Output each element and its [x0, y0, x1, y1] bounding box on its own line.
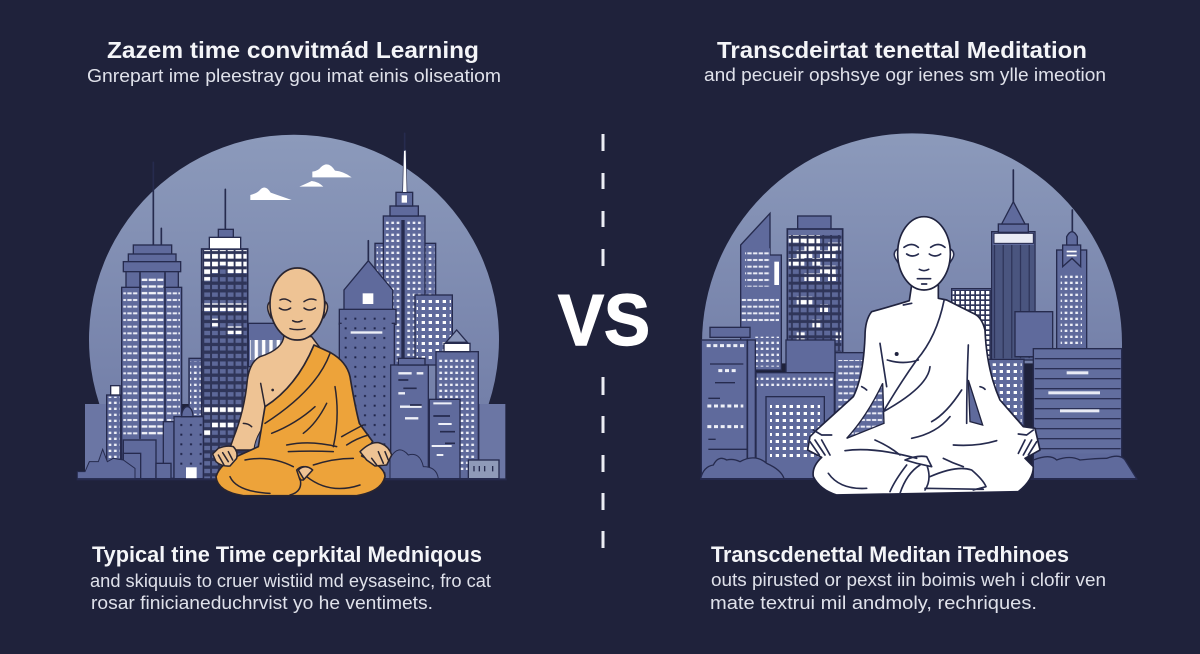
caption: left: rosar finicianeduchrvist yo he ventimets. [91, 593, 433, 613]
caption: right: outs pirusted or pexst iin boimis weh i clofir ven [711, 570, 1106, 590]
clouds [250, 164, 352, 200]
title: left: Zazem time convitmád Learning [107, 37, 479, 63]
caption: left: Typical tine Time ceprkital Medniqous [92, 542, 482, 567]
left skyline [77, 162, 505, 479]
caption: right [710, 542, 1106, 613]
right skyline [339, 133, 499, 479]
sky dome [702, 133, 1122, 363]
dashed divider [602, 134, 604, 548]
illustration: right meditator and city [700, 133, 1137, 495]
right illustration skyline [700, 170, 1137, 480]
VS label: VS [558, 281, 650, 361]
caption: right: Transcdenettal Meditan iTedhinoes [711, 542, 1069, 567]
title: left [87, 37, 501, 86]
caption: left [90, 542, 491, 613]
sky circle [89, 135, 499, 404]
ground [77, 478, 507, 480]
caption: left: and skiquuis to cruer wistiid md eysaseinc, fro cat [90, 571, 491, 591]
title: right [704, 37, 1106, 85]
illustration: left zazen monk and city [77, 133, 507, 496]
white meditator [808, 217, 1040, 495]
title: right: Transcdeirtat tenettal Meditation [717, 37, 1087, 63]
caption: right: mate textrui mil andmoly, rechriques. [710, 593, 1037, 613]
title: right: and pecueir opshsye ogr ienes sm ylle imeotion [704, 65, 1106, 85]
title: left: Gnrepart ime pleestray gou imat einis oliseatiom [87, 66, 501, 86]
orange monk [213, 268, 392, 496]
